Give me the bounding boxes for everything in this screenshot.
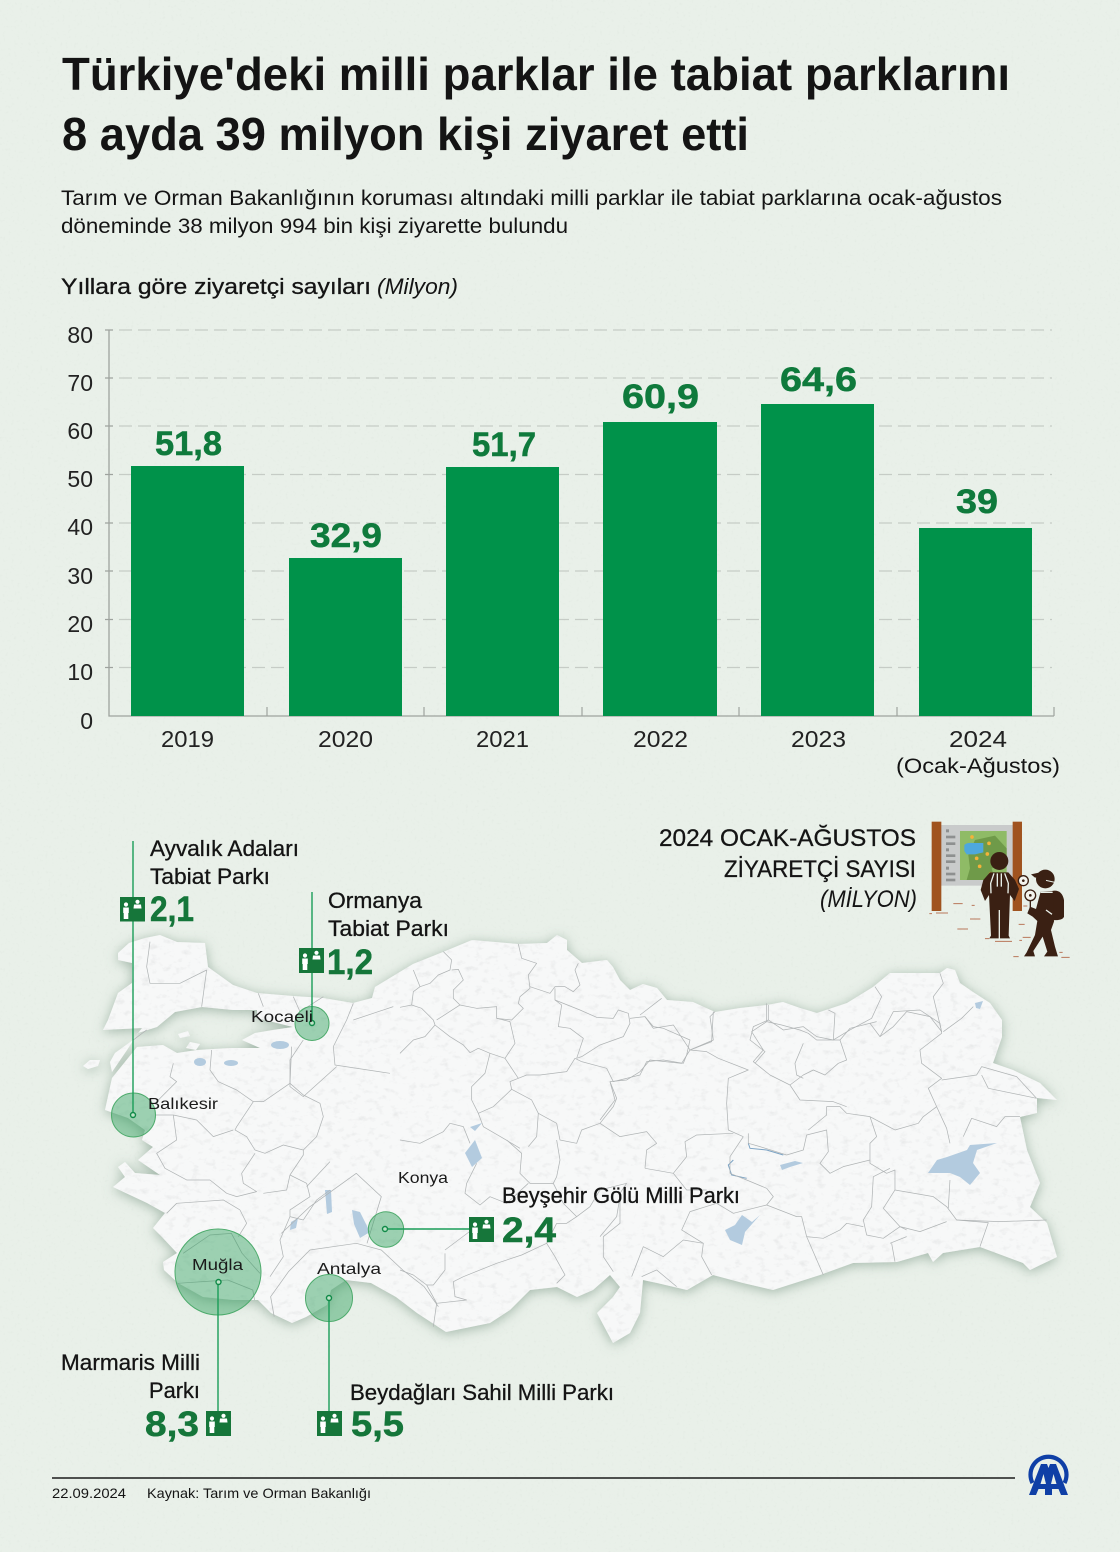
bar 2023: 64,6 [780,361,857,399]
chart grid and axes [105,330,1054,716]
callout: Ayvalık Adaları Tabiat Parkı: Balıkesir [148,1096,219,1113]
map section heading: ZİYARETÇİ SAYISI [724,856,916,883]
callout: Ayvalık Adaları Tabiat Parkı: 2,1 [150,890,194,929]
bar 2022: 2022 [633,726,688,752]
bar 2023 [761,361,874,752]
callout: Beyşehir Gölü Milli Parkı: Konya [398,1170,448,1187]
callout: Beydağları Sahil Milli Parkı: Beydağları Sahil Milli Parkı [350,1380,614,1405]
bar 2024: 2024 [949,726,1007,752]
callout: Marmaris Milli Parkı: Muğla [192,1257,243,1274]
bar 2020 [289,517,402,752]
y axis labels [67,322,93,734]
footer: 22.09.2024 [52,1485,126,1501]
bar 2021: 51,7 [472,426,536,464]
chart heading: Yıllara göre ziyaretçi sayıları [61,274,371,299]
footer [52,1478,1015,1501]
map section heading [659,825,917,913]
subtitle: döneminde 38 milyon 994 bin kişi ziyarette bulundu [61,215,568,238]
subtitle: Tarım ve Orman Bakanlığının koruması altındaki milli parklar ile tabiat parklarına ocak-ağustos [61,187,1002,210]
flowers [1018,876,1036,901]
bar 2024 [896,483,1060,778]
callout: Ormanya Tabiat Parkı: Kocaeli [251,1009,313,1026]
icon: visitor desk [206,1411,231,1436]
bar 2019 [131,425,244,752]
y axis labels: 10 [67,659,93,685]
callout: Beydağları Sahil Milli Parkı: 5,5 [351,1405,404,1444]
path dashes [929,904,1070,957]
callout: Beydağları Sahil Milli Parkı [306,1261,614,1444]
map of Turkey [80,925,1065,1350]
land [83,935,1057,1343]
callout: Beyşehir Gölü Milli Parkı: Beyşehir Gölü Milli Parkı [502,1183,740,1208]
map section heading: 2024 OCAK-AĞUSTOS [659,825,916,852]
callout: Ormanya Tabiat Parkı: Tabiat Parkı [328,916,449,941]
icon: visitor desk [469,1217,494,1242]
bar 2022 [603,378,717,752]
y axis labels: 50 [67,466,93,492]
y axis labels: 60 [67,418,93,444]
callout: Marmaris Milli Parkı: Marmaris Milli [61,1350,200,1375]
bar 2023: 2023 [791,726,846,752]
bar 2019: 51,8 [155,425,222,463]
callout: Ormanya Tabiat Parkı [251,888,449,1040]
chart heading: (Milyon) [377,274,458,299]
bar 2021 [446,426,559,752]
map section heading: (MİLYON) [820,886,917,913]
person one [981,852,1019,938]
subtitle [61,187,1002,238]
bar chart [67,322,1060,778]
footer: Kaynak: Tarım ve Orman Bakanlığı [147,1485,371,1501]
bar 2020: 32,9 [310,517,382,555]
callout: Marmaris Milli Parkı [61,1229,261,1444]
province borders [133,942,1047,1327]
bar 2024: 39 [956,483,998,521]
bar 2019: 2019 [161,726,214,752]
callout: Marmaris Milli Parkı: Parkı [149,1378,200,1403]
callout: Beyşehir Gölü Milli Parkı: 2,4 [502,1211,557,1250]
board [932,822,1022,911]
chart heading [61,274,458,299]
icon: visitors reading a park map board [929,822,1070,957]
bar 2024: (Ocak-Ağustos) [896,755,1060,778]
lakes and reservoirs [194,1001,997,1245]
icon: visitor desk [299,948,324,973]
icon: visitor desk [317,1411,342,1436]
callout: Ayvalık Adaları Tabiat Parkı: Tabiat Parkı [150,864,270,889]
y axis labels: 70 [67,370,93,396]
y axis labels: 80 [67,322,93,348]
callout: Beyşehir Gölü Milli Parkı [368,1170,740,1250]
callout: Ormanya Tabiat Parkı: 1,2 [327,943,373,982]
callout: Marmaris Milli Parkı: 8,3 [145,1405,199,1444]
person two [1024,870,1064,956]
callout: Ormanya Tabiat Parkı: Ormanya [328,888,423,913]
title [62,48,1010,160]
title: Türkiye'deki milli parklar ile tabiat parklarını [62,48,1010,100]
icon: visitor desk [120,897,145,922]
y axis labels: 30 [67,563,93,589]
bar 2021: 2021 [476,726,529,752]
icon: AA logo [1029,1457,1068,1495]
title: 8 ayda 39 milyon kişi ziyaret etti [62,108,749,160]
bar 2022: 60,9 [622,378,699,416]
terrain shading [80,925,1065,1350]
callout: Ayvalık Adaları Tabiat Parkı [112,836,299,1137]
y axis labels: 40 [67,514,93,540]
y axis labels: 0 [80,708,93,734]
callout: Ayvalık Adaları Tabiat Parkı: Ayvalık Adaları [150,836,299,861]
bar 2020: 2020 [318,726,373,752]
y axis labels: 20 [67,611,93,637]
callout: Beydağları Sahil Milli Parkı: Antalya [317,1261,381,1278]
